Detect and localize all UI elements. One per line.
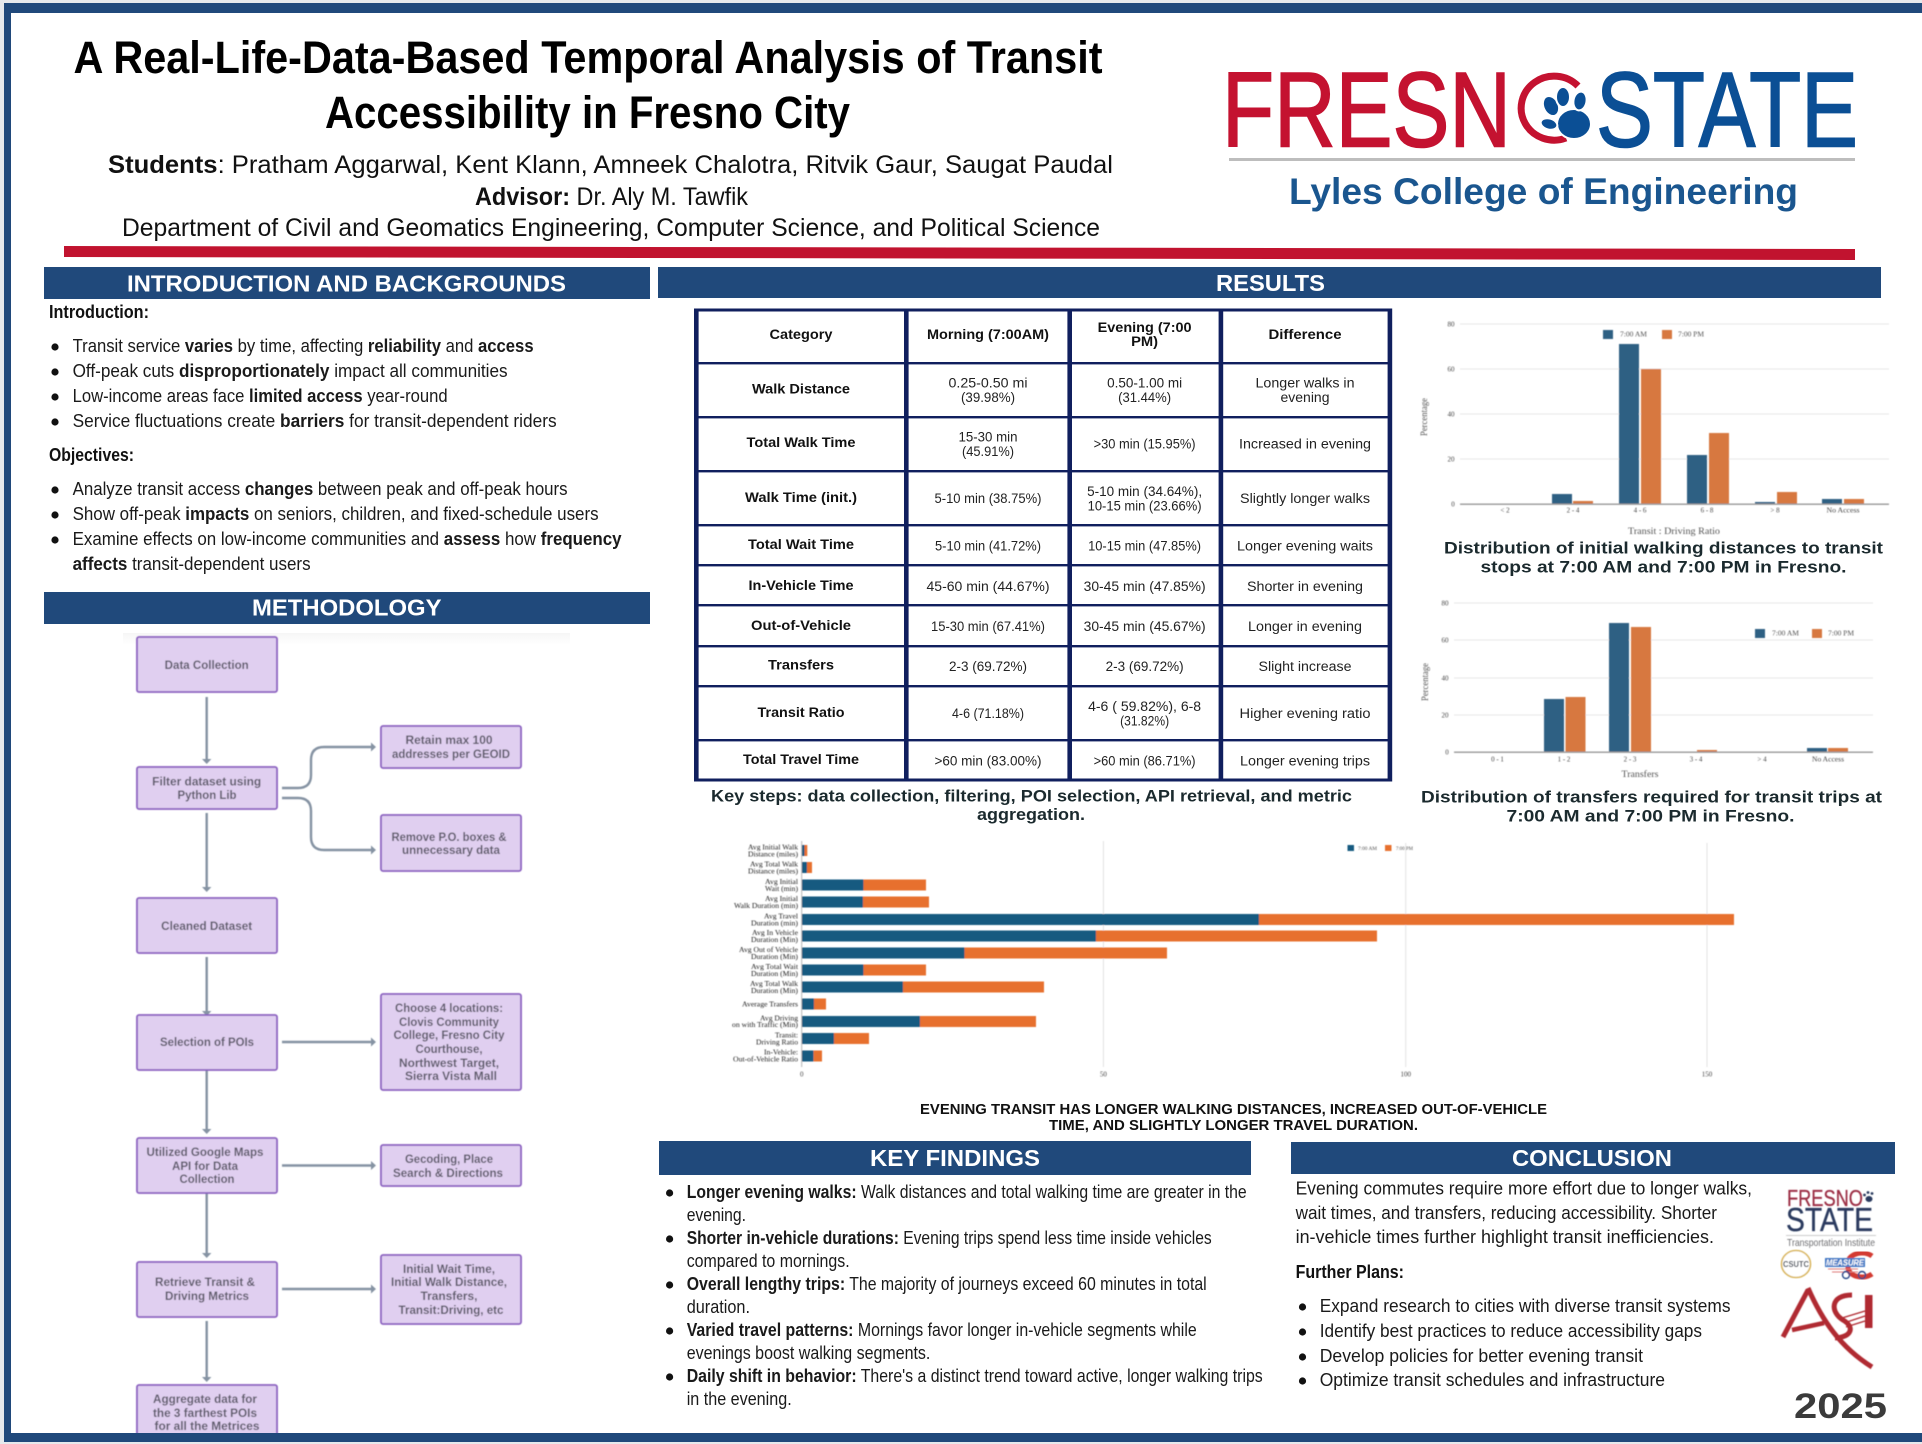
findings list: Overall lengthy trips: The majority of journeys exceed 60 minutes in total: [687, 1274, 1207, 1294]
metric labels: Avg Total Walk: [750, 860, 798, 868]
text block: introduction: Low-income areas face limited access year-round: [73, 386, 448, 406]
text block: introduction: [49, 302, 557, 431]
metric labels: Distance (miles): [748, 866, 799, 876]
panel: methodology: [44, 592, 650, 1439]
table row: total walk time: [746, 430, 1371, 459]
table row: walk distance: (39.98%): [961, 390, 1015, 405]
flow box: geocoding: Search & Directions: [393, 1168, 503, 1180]
table row: in-vehicle time: In-Vehicle Time: [748, 578, 854, 593]
flow box: metric list: [381, 1255, 521, 1324]
flow box: choose locations: [381, 994, 521, 1090]
logo: Fresno State Transportation Institute: FRESNO: [1787, 1185, 1863, 1211]
logo: Fresno State: FRESN: [1222, 50, 1511, 170]
metric labels: Avg Out of Vehicle: [739, 945, 799, 954]
chart: transit to driving ratio distribution: Percentage: [1420, 398, 1430, 436]
table row: transit ratio: (31.82%): [1120, 714, 1169, 728]
chart: transfers distribution: 7:00 AM: [1772, 630, 1800, 638]
table row: walk distance: evening: [1280, 390, 1330, 405]
table header: PM): [1131, 334, 1158, 349]
chart: transfers distribution: No Access: [1812, 756, 1844, 764]
caption: transfers chart: 7:00 AM and 7:00 PM in Fresno.: [1506, 806, 1794, 826]
findings list: in the evening.: [687, 1389, 792, 1409]
further plans list: Expand research to cities with diverse transit systems: [1320, 1296, 1730, 1316]
logo: Fresno State: STATE: [1596, 50, 1858, 170]
table row: transfers: [768, 658, 1352, 674]
metric labels: Duration (min): [751, 918, 799, 928]
flow box: metric list: Transit:Driving, etc: [398, 1305, 504, 1317]
table row: total walk time: Total Walk Time: [746, 435, 856, 450]
table row: walk distance: (31.44%): [1118, 390, 1171, 405]
flow box: choose locations: Sierra Vista Mall: [405, 1071, 497, 1083]
heading: methodology: METHODOLOGY: [252, 594, 442, 620]
findings list: Shorter in-vehicle durations: Evening trips spend less time inside vehicles: [687, 1228, 1212, 1248]
authors and affiliation: Department of Civil and Geomatics Engineering, Computer Science, and Political Science: [122, 214, 1100, 242]
text block: introduction: Introduction:: [49, 302, 149, 322]
metric labels: Avg In Vehicle: [752, 928, 799, 937]
chart: stacked averages by metric: 7:00 AM: [1358, 847, 1378, 852]
flow box: metric list: Transfers,: [420, 1291, 478, 1303]
table row: initial walk time: Walk Time (init.): [745, 490, 857, 505]
table row: transfers: 2-3 (69.72%): [949, 659, 1027, 674]
chart: stacked averages by metric: 100: [1400, 1070, 1411, 1078]
chart: stacked averages by metric: 150: [1702, 1070, 1713, 1078]
chart: transit to driving ratio distribution: 7:00 AM: [1620, 330, 1648, 338]
flowchart: [137, 637, 521, 1439]
chart: transfers distribution: Transfers: [1622, 769, 1659, 780]
chart: transit to driving ratio distribution: < 2: [1500, 506, 1510, 514]
caption: key steps: Key steps: data collection, filtering, POI selection, API retrieval, and metric: [711, 786, 1352, 806]
table row: transit ratio: 4-6 ( 59.82%), 6-8: [1088, 699, 1201, 714]
chart: transit to driving ratio distribution: 2 - 4: [1567, 506, 1580, 514]
metric labels: Distance (miles): [748, 850, 799, 858]
metric labels: Wait (min): [765, 884, 799, 893]
chart: transfers distribution: 1 - 2: [1558, 756, 1571, 764]
further plans list: Optimize transit schedules and infrastructure: [1320, 1370, 1665, 1390]
year 2025: 2025: [1794, 1387, 1887, 1426]
table header: Difference: [1268, 327, 1342, 342]
chart: transit to driving ratio distribution: 40: [1448, 410, 1455, 418]
table row: total travel time: Longer evening trips: [1240, 754, 1370, 768]
chart: transit to driving ratio distribution: 4 - 6: [1634, 506, 1647, 514]
findings list: Varied travel patterns: Mornings favor longer in-vehicle segments while: [687, 1320, 1197, 1340]
flow box: geocoding: Gecoding, Place: [405, 1154, 493, 1166]
further plans list: Identify best practices to reduce accessibility gaps: [1320, 1321, 1702, 1341]
logo: Measure C: [1825, 1253, 1872, 1278]
heading: key findings: [659, 1141, 1251, 1175]
findings list: Longer evening walks: Walk distances and total walking time are greater in the: [687, 1182, 1247, 1202]
metric labels: In-Vehicle:: [764, 1048, 798, 1056]
table row: transit ratio: Transit Ratio: [758, 705, 844, 720]
table row: total wait time: Total Wait Time: [748, 537, 855, 552]
caption: stacked chart: EVENING TRANSIT HAS LONGER WALKING DISTANCES, INCREASED OUT-OF-VEHICLE: [920, 1102, 1547, 1118]
authors and affiliation: Advisor: Dr. Aly M. Tawfik: [475, 183, 748, 211]
table row: initial walk time: 10-15 min (23.66%): [1088, 498, 1202, 514]
flow box: choose locations: Clovis Community: [399, 1017, 500, 1029]
logo: CSUTC: CSUTC: [1783, 1260, 1809, 1269]
chart: stacked averages by metric: 0: [800, 1070, 804, 1078]
flow box: remove P.O. boxes: Remove P.O. boxes &: [392, 832, 506, 844]
flow box: filter dataset: Python Lib: [178, 790, 236, 802]
chart: transfers distribution: 0 - 1: [1491, 756, 1504, 764]
table row: total travel time: >60 min (86.71%): [1094, 754, 1196, 768]
panel: introduction and backgrounds: [44, 267, 650, 574]
chart: transfers distribution: 7:00 PM: [1828, 630, 1855, 638]
flow box: geocoding: [381, 1145, 521, 1186]
caption: key steps: [711, 786, 1352, 824]
flow box: retrieve metrics: Driving Metrics: [165, 1291, 249, 1303]
title: Accessibility in Fresno City: [325, 87, 850, 138]
table row: initial walk time: [745, 484, 1370, 514]
table row: in-vehicle time: 45-60 min (44.67%): [926, 579, 1050, 594]
metric labels: Avg Initial: [765, 894, 798, 903]
table row: total walk time: 15-30 min: [958, 430, 1018, 444]
table row: initial walk time: 5-10 min (34.64%),: [1087, 484, 1202, 499]
chart: transit to driving ratio distribution: 60: [1448, 366, 1455, 374]
chart: transfers distribution: Percentage: [1421, 663, 1431, 701]
logo: Measure C: MEASURE: [1826, 1258, 1865, 1268]
red rule: [64, 246, 1855, 260]
table row: total travel time: >60 min (83.00%): [934, 754, 1042, 768]
chart: stacked averages by metric: 7:00 PM: [1396, 847, 1414, 852]
table row: transfers: Slight increase: [1258, 659, 1352, 674]
table row: total travel time: Total Travel Time: [743, 752, 860, 767]
flow box: aggregate data: [137, 1385, 277, 1439]
flow box: data collection: Data Collection: [165, 660, 249, 672]
flow box: aggregate data: Aggregate data for: [153, 1394, 258, 1406]
heading: introduction: INTRODUCTION AND BACKGROUNDS: [127, 270, 566, 296]
heading: conclusion: [1291, 1142, 1895, 1174]
caption: walking distances chart: [1444, 538, 1883, 576]
title: [74, 32, 1103, 138]
panel: key findings: [659, 1141, 1263, 1409]
heading: key findings: KEY FINDINGS: [870, 1145, 1040, 1171]
chart: transit to driving ratio distribution: Transit : Driving Ratio: [1628, 527, 1720, 537]
flow box: filter dataset: Filter dataset using: [152, 776, 261, 788]
logo: Fresno State Transportation Institute: [1786, 1185, 1876, 1249]
table row: out-of-vehicle: Longer in evening: [1248, 619, 1362, 634]
table row: in-vehicle time: Shorter in evening: [1247, 579, 1363, 594]
table row: out-of-vehicle: [751, 618, 1362, 634]
flow box: filter dataset: [137, 767, 277, 809]
title: A Real-Life-Data-Based Temporal Analysis of Transit: [74, 32, 1103, 83]
flow box: selection of POIs: Selection of POIs: [160, 1037, 254, 1049]
caption: key steps: aggregation.: [977, 805, 1085, 824]
chart: transit to driving ratio distribution: 80: [1448, 320, 1455, 328]
flow box: retain addresses: addresses per GEOID: [392, 749, 510, 761]
metric labels: Duration (Min): [751, 952, 798, 961]
authors and affiliation: [108, 151, 1113, 242]
flow box: metric list: Initial Wait Time,: [403, 1264, 495, 1276]
table row: in-vehicle time: [748, 578, 1363, 594]
flow box: metric list: Initial Walk Distance,: [391, 1277, 507, 1289]
metric labels: on with Traffic (Min): [732, 1020, 799, 1029]
table row: transit ratio: 4-6 (71.18%): [952, 706, 1024, 721]
flow box: cleaned dataset: [137, 898, 277, 953]
metric labels: Walk Duration (min): [734, 901, 799, 910]
conclusion text: Evening commutes require more effort due to longer walks,: [1296, 1178, 1752, 1198]
flow arrows: [202, 697, 376, 1382]
logo: Fresno State Transportation Institute: Transportation Institute: [1787, 1237, 1875, 1249]
metric labels: Duration (Min): [751, 986, 798, 995]
conclusion text: wait times, and transfers, reducing accessibility. Shorter: [1295, 1203, 1717, 1223]
table row: out-of-vehicle: Out-of-Vehicle: [751, 618, 852, 633]
table row: walk distance: Longer walks in: [1256, 376, 1354, 390]
flow box: remove P.O. boxes: unnecessary data: [402, 845, 501, 857]
logo: Fresno State: Lyles College of Engineering: [1289, 171, 1798, 212]
flow box: remove P.O. boxes: [381, 815, 521, 871]
panel: conclusion: [1291, 1142, 1895, 1426]
flow box: choose locations: College, Fresno City: [394, 1030, 505, 1042]
metric labels: Avg Total Wait: [751, 962, 799, 971]
metric labels: Transit:: [775, 1030, 798, 1040]
chart: transit to driving ratio distribution: > 8: [1770, 506, 1780, 514]
chart: transit to driving ratio distribution: 20: [1448, 456, 1455, 464]
findings list: Daily shift in behavior: There's a distinct trend toward active, longer walking trips: [687, 1366, 1263, 1386]
text block: introduction: Off-peak cuts disproportionately impact all communities: [73, 361, 508, 381]
flow box: data collection: [137, 637, 277, 692]
flow box: choose locations: Courthouse,: [416, 1044, 482, 1056]
flow box: retain addresses: [381, 726, 521, 768]
metric labels: Avg Initial Walk: [748, 842, 798, 852]
table header: Morning (7:00AM): [927, 327, 1049, 342]
conclusion text: [1295, 1178, 1752, 1247]
metric labels: Avg Total Walk: [750, 979, 798, 988]
findings list: [666, 1182, 1263, 1409]
further plans list: Develop policies for better evening transit: [1320, 1346, 1643, 1366]
chart: transit to driving ratio distribution: 0: [1451, 500, 1455, 508]
table header: Evening (7:00: [1098, 320, 1192, 335]
caption: stacked chart: [920, 1102, 1547, 1134]
flow box: Google Maps API: API for Data: [172, 1161, 239, 1173]
table row: total wait time: 10-15 min (47.85%): [1088, 538, 1201, 554]
chart: transit to driving ratio distribution: 7:00 PM: [1678, 330, 1705, 338]
text block: introduction: Service fluctuations create barriers for transit-dependent riders: [73, 411, 557, 431]
table row: walk distance: 0.50-1.00 mi: [1107, 376, 1182, 390]
logo: Fresno State: [1222, 50, 1858, 212]
text block: objectives: Examine effects on low-income communities and assess how frequency: [73, 529, 622, 549]
chart: transfers distribution: 2 - 3: [1624, 756, 1637, 764]
chart: transfers distribution: 80: [1442, 600, 1449, 608]
table row: total walk time: (45.91%): [962, 444, 1014, 459]
chart: stacked averages by metric: [732, 841, 1734, 1078]
logo: Fresno State Transportation Institute: STATE: [1786, 1201, 1873, 1238]
panel: results: [658, 267, 1889, 1134]
further plans list: Further Plans:: [1296, 1262, 1404, 1282]
caption: transfers chart: [1421, 788, 1882, 826]
text block: objectives: [49, 445, 622, 574]
flow box: selection of POIs: [137, 1015, 277, 1070]
flow box: retrieve metrics: [137, 1262, 277, 1317]
table row: walk distance: [752, 376, 1354, 405]
chart: transfers distribution: > 4: [1757, 756, 1767, 764]
table row: out-of-vehicle: 30-45 min (45.67%): [1084, 619, 1206, 634]
metric labels: Duration (Min): [751, 935, 798, 944]
caption: transfers chart: Distribution of transfers required for transit trips at: [1421, 788, 1882, 806]
flow box: Google Maps API: [137, 1138, 277, 1193]
authors and affiliation: Students: Pratham Aggarwal, Kent Klann, Amneek Chalotra, Ritvik Gaur, Saugat Paudal: [108, 151, 1113, 179]
heading: conclusion: CONCLUSION: [1512, 1145, 1672, 1171]
flow box: choose locations: Northwest Target,: [399, 1058, 499, 1070]
text block: objectives: Analyze transit access changes between peak and off-peak hours: [73, 479, 568, 499]
table row: initial walk time: Slightly longer walks: [1240, 491, 1370, 506]
flow box: retrieve metrics: Retrieve Transit &: [155, 1277, 255, 1289]
text block: objectives: Objectives:: [49, 445, 134, 465]
metric labels: Out-of-Vehicle Ratio: [733, 1054, 798, 1064]
icon: paw: [1539, 87, 1591, 139]
caption: stacked chart: TIME, AND SLIGHTLY LONGER TRAVEL DURATION.: [1049, 1118, 1418, 1134]
flow box: aggregate data: the 3 farthest POIs: [153, 1408, 257, 1420]
findings list: duration.: [687, 1297, 750, 1317]
table row: in-vehicle time: 30-45 min (47.85%): [1084, 579, 1206, 594]
metric labels: Driving Ratio: [756, 1038, 798, 1046]
metric labels: Duration (Min): [751, 969, 798, 978]
chart: transfers distribution: 3 - 4: [1690, 756, 1703, 764]
flow box: cleaned dataset: Cleaned Dataset: [161, 921, 252, 933]
flow box: aggregate data: for all the Metrices: [154, 1421, 260, 1433]
table row: transfers: Transfers: [768, 658, 834, 672]
table header: [770, 320, 1342, 349]
logo: ASI: [1783, 1288, 1872, 1367]
chart: transfers distribution: [1421, 600, 1873, 780]
table row: initial walk time: 5-10 min (38.75%): [934, 491, 1042, 506]
chart: transfers distribution: 60: [1442, 636, 1449, 644]
chart: transfers distribution: 20: [1442, 712, 1449, 720]
heading: methodology: [44, 592, 650, 624]
table row: total wait time: Longer evening waits: [1237, 538, 1373, 554]
text block: objectives: affects transit-dependent users: [73, 554, 311, 574]
heading: results: [658, 267, 1881, 298]
table row: total wait time: [748, 537, 1373, 554]
findings list: compared to mornings.: [687, 1251, 850, 1271]
table row: total walk time: Increased in evening: [1239, 436, 1371, 452]
heading: introduction: [44, 267, 650, 299]
flow box: retain addresses: Retain max 100: [406, 735, 492, 747]
findings list: evening.: [687, 1205, 746, 1225]
table row: transit ratio: [758, 699, 1370, 728]
table row: total wait time: 5-10 min (41.72%): [935, 538, 1041, 554]
further plans list: [1296, 1262, 1730, 1390]
flow box: choose locations: Choose 4 locations:: [395, 1003, 503, 1015]
findings list: evenings boost walking segments.: [687, 1343, 930, 1363]
caption: walking distances chart: Distribution of initial walking distances to transit: [1444, 538, 1883, 558]
heading: results: RESULTS: [1216, 270, 1325, 296]
flow box: Google Maps API: Utilized Google Maps: [146, 1147, 264, 1159]
metric labels: Avg Travel: [764, 912, 798, 920]
table row: total walk time: >30 min (15.95%): [1094, 436, 1196, 452]
table row: transfers: 2-3 (69.72%): [1106, 659, 1184, 674]
table header: Category: [770, 327, 833, 342]
chart: transit to driving ratio distribution: [1420, 320, 1889, 537]
metric labels: Avg Driving: [760, 1014, 798, 1022]
table row: total travel time: [743, 752, 1370, 768]
caption: walking distances chart: stops at 7:00 AM and 7:00 PM in Fresno.: [1480, 558, 1846, 576]
chart: transfers distribution: 0: [1445, 748, 1449, 756]
table row: walk distance: 0.25-0.50 mi: [948, 376, 1028, 390]
results table: [694, 308, 1392, 782]
table row: transit ratio: Higher evening ratio: [1240, 706, 1370, 721]
table row: walk distance: Walk Distance: [752, 382, 851, 396]
logo: CSUTC: [1782, 1250, 1810, 1278]
chart: transit to driving ratio distribution: No Access: [1826, 506, 1860, 514]
chart: stacked averages by metric: 50: [1100, 1070, 1107, 1078]
metric labels: [732, 842, 799, 1064]
conclusion text: in-vehicle times further highlight transit inefficiencies.: [1296, 1227, 1714, 1247]
table row: out-of-vehicle: 15-30 min (67.41%): [931, 619, 1045, 634]
chart: transfers distribution: 40: [1442, 674, 1449, 682]
flow box: Google Maps API: Collection: [180, 1174, 234, 1186]
text block: introduction: Transit service varies by time, affecting reliability and access: [73, 336, 534, 356]
text block: objectives: Show off-peak impacts on seniors, children, and fixed-schedule users: [73, 504, 599, 524]
metric labels: Avg Initial: [765, 877, 798, 886]
chart: transit to driving ratio distribution: 6 - 8: [1701, 506, 1714, 514]
metric labels: Average Transfers: [742, 1000, 798, 1008]
